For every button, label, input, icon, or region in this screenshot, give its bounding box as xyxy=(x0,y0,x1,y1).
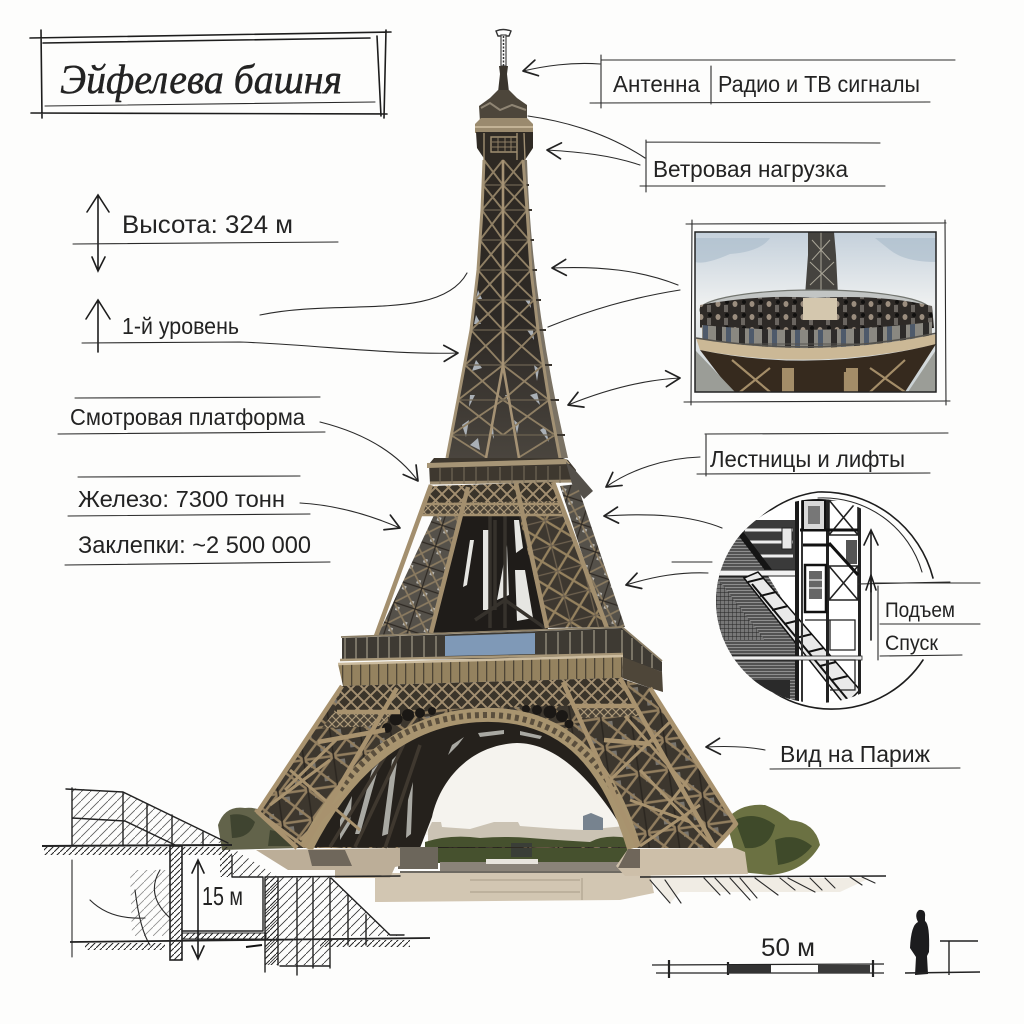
foundation slope xyxy=(232,848,278,877)
circle arrows xyxy=(604,515,722,585)
platform arrows xyxy=(548,268,680,405)
foundation base line xyxy=(70,938,430,942)
fine lattice band xyxy=(421,501,566,516)
left middle panel xyxy=(378,512,462,635)
distant tower block xyxy=(583,813,603,830)
tower dome xyxy=(479,90,527,122)
stairs and lifts callout: Лестницы и лифты xyxy=(710,446,905,472)
horizon sky xyxy=(410,735,640,835)
middle section ribs xyxy=(376,482,607,636)
detail lift upper xyxy=(803,500,825,530)
title: Эйфелева башня xyxy=(60,56,342,102)
photo deck xyxy=(696,334,937,360)
person silhouette xyxy=(910,910,929,975)
foundation dimension arrow xyxy=(192,860,204,959)
iron weight callout xyxy=(68,476,400,528)
antenna callout: Радио и ТВ сигналы xyxy=(718,71,920,97)
base of left inner legs xyxy=(398,847,438,869)
antenna callout: Антенна xyxy=(613,71,700,97)
first level railing xyxy=(340,627,662,672)
plaza xyxy=(375,873,654,902)
observation platform photo xyxy=(684,220,950,405)
Eiffel tower xyxy=(255,30,748,878)
height callout: Высота: 324 м xyxy=(122,211,293,239)
opening light gaps xyxy=(463,520,533,621)
main arch band xyxy=(306,715,634,848)
right leg bracing xyxy=(610,716,712,846)
lower lattice band xyxy=(322,710,395,728)
tree line xyxy=(425,837,632,863)
wind load callout xyxy=(528,116,885,192)
observation platform callout xyxy=(58,397,418,481)
foundation mound xyxy=(72,788,227,845)
detail frame columns xyxy=(795,495,799,705)
foundation right block xyxy=(265,877,398,965)
height callout xyxy=(73,195,338,271)
detail lower beam xyxy=(712,656,862,660)
right pier xyxy=(616,848,748,876)
observation platform callout: Смотровая платформа xyxy=(70,404,305,430)
detail lattice xyxy=(829,500,858,600)
inner legs below arch xyxy=(303,708,638,848)
detail hatched stair mass xyxy=(712,530,795,705)
detail diagonal stair xyxy=(744,572,860,705)
x band xyxy=(425,482,562,506)
first level fascia xyxy=(338,656,663,692)
circle detail: stairs and lifts xyxy=(712,492,933,709)
up and down callout: Спуск xyxy=(885,632,939,655)
distant city xyxy=(428,822,632,846)
left trees xyxy=(218,808,300,850)
shaft bracing xyxy=(451,160,555,458)
antenna xyxy=(496,30,511,92)
title panel xyxy=(30,30,391,118)
photo central kiosk xyxy=(803,298,837,320)
scale bar: 50 м xyxy=(761,934,815,962)
up and down callout: Подъем xyxy=(885,599,955,622)
height arrow xyxy=(87,195,109,271)
antenna callout xyxy=(523,55,955,108)
scale bar xyxy=(652,934,884,978)
up arrows xyxy=(864,530,878,640)
foundation floor strip xyxy=(182,933,266,939)
foundation soil xyxy=(72,860,170,957)
detail lift car xyxy=(805,565,826,612)
background city and ground behind the tower xyxy=(218,735,820,902)
foundation cross-section sketch xyxy=(42,788,430,975)
photo tower xyxy=(806,232,838,290)
second level deck xyxy=(427,458,593,499)
detail building floors xyxy=(735,520,795,570)
right trees xyxy=(726,805,820,875)
left leg bracing xyxy=(255,740,360,847)
rivets callout: Заклепки: ~2 500 000 xyxy=(78,532,311,559)
photo crowd lower xyxy=(702,322,932,350)
upper lattice band xyxy=(334,678,630,712)
photo crowd upper xyxy=(700,297,934,332)
lower body xyxy=(258,678,736,848)
inner leg light gaps xyxy=(340,730,542,840)
wind load callout: Ветровая нагрузка xyxy=(653,156,848,182)
upper shaft xyxy=(447,160,560,458)
middle section side face xyxy=(560,484,625,628)
view of Paris callout: Вид на Париж xyxy=(780,741,931,767)
top platform xyxy=(475,118,533,160)
foundation column xyxy=(170,846,182,960)
foundation cross-section sketch: 15 м xyxy=(202,881,243,911)
foundation ground line xyxy=(42,845,232,846)
detail white beam xyxy=(712,570,796,576)
plaza kiosks xyxy=(440,862,630,872)
leg ribs xyxy=(258,678,736,848)
spandrel arches xyxy=(382,705,574,733)
first level callout: 1-й уровень xyxy=(122,313,239,339)
shaft light gaps xyxy=(462,290,549,450)
first level callout xyxy=(82,273,467,353)
left pier xyxy=(256,848,400,878)
iron weight callout: Железо: 7300 тонн xyxy=(78,486,285,512)
paved ground sketch xyxy=(640,876,886,903)
upper shaft side face xyxy=(523,160,568,458)
photo railing back xyxy=(699,289,928,312)
stairs and lifts callout xyxy=(606,433,948,487)
photo substructure xyxy=(700,344,936,392)
table symbol xyxy=(905,941,980,975)
photo clouds xyxy=(695,238,936,263)
plaza building xyxy=(511,843,532,857)
view of Paris callout xyxy=(706,741,960,769)
right middle panel xyxy=(518,508,606,628)
foundation chamber xyxy=(182,856,263,931)
first level arrow xyxy=(86,300,110,352)
middle section centre opening xyxy=(430,510,548,633)
up and down callout xyxy=(858,530,980,660)
